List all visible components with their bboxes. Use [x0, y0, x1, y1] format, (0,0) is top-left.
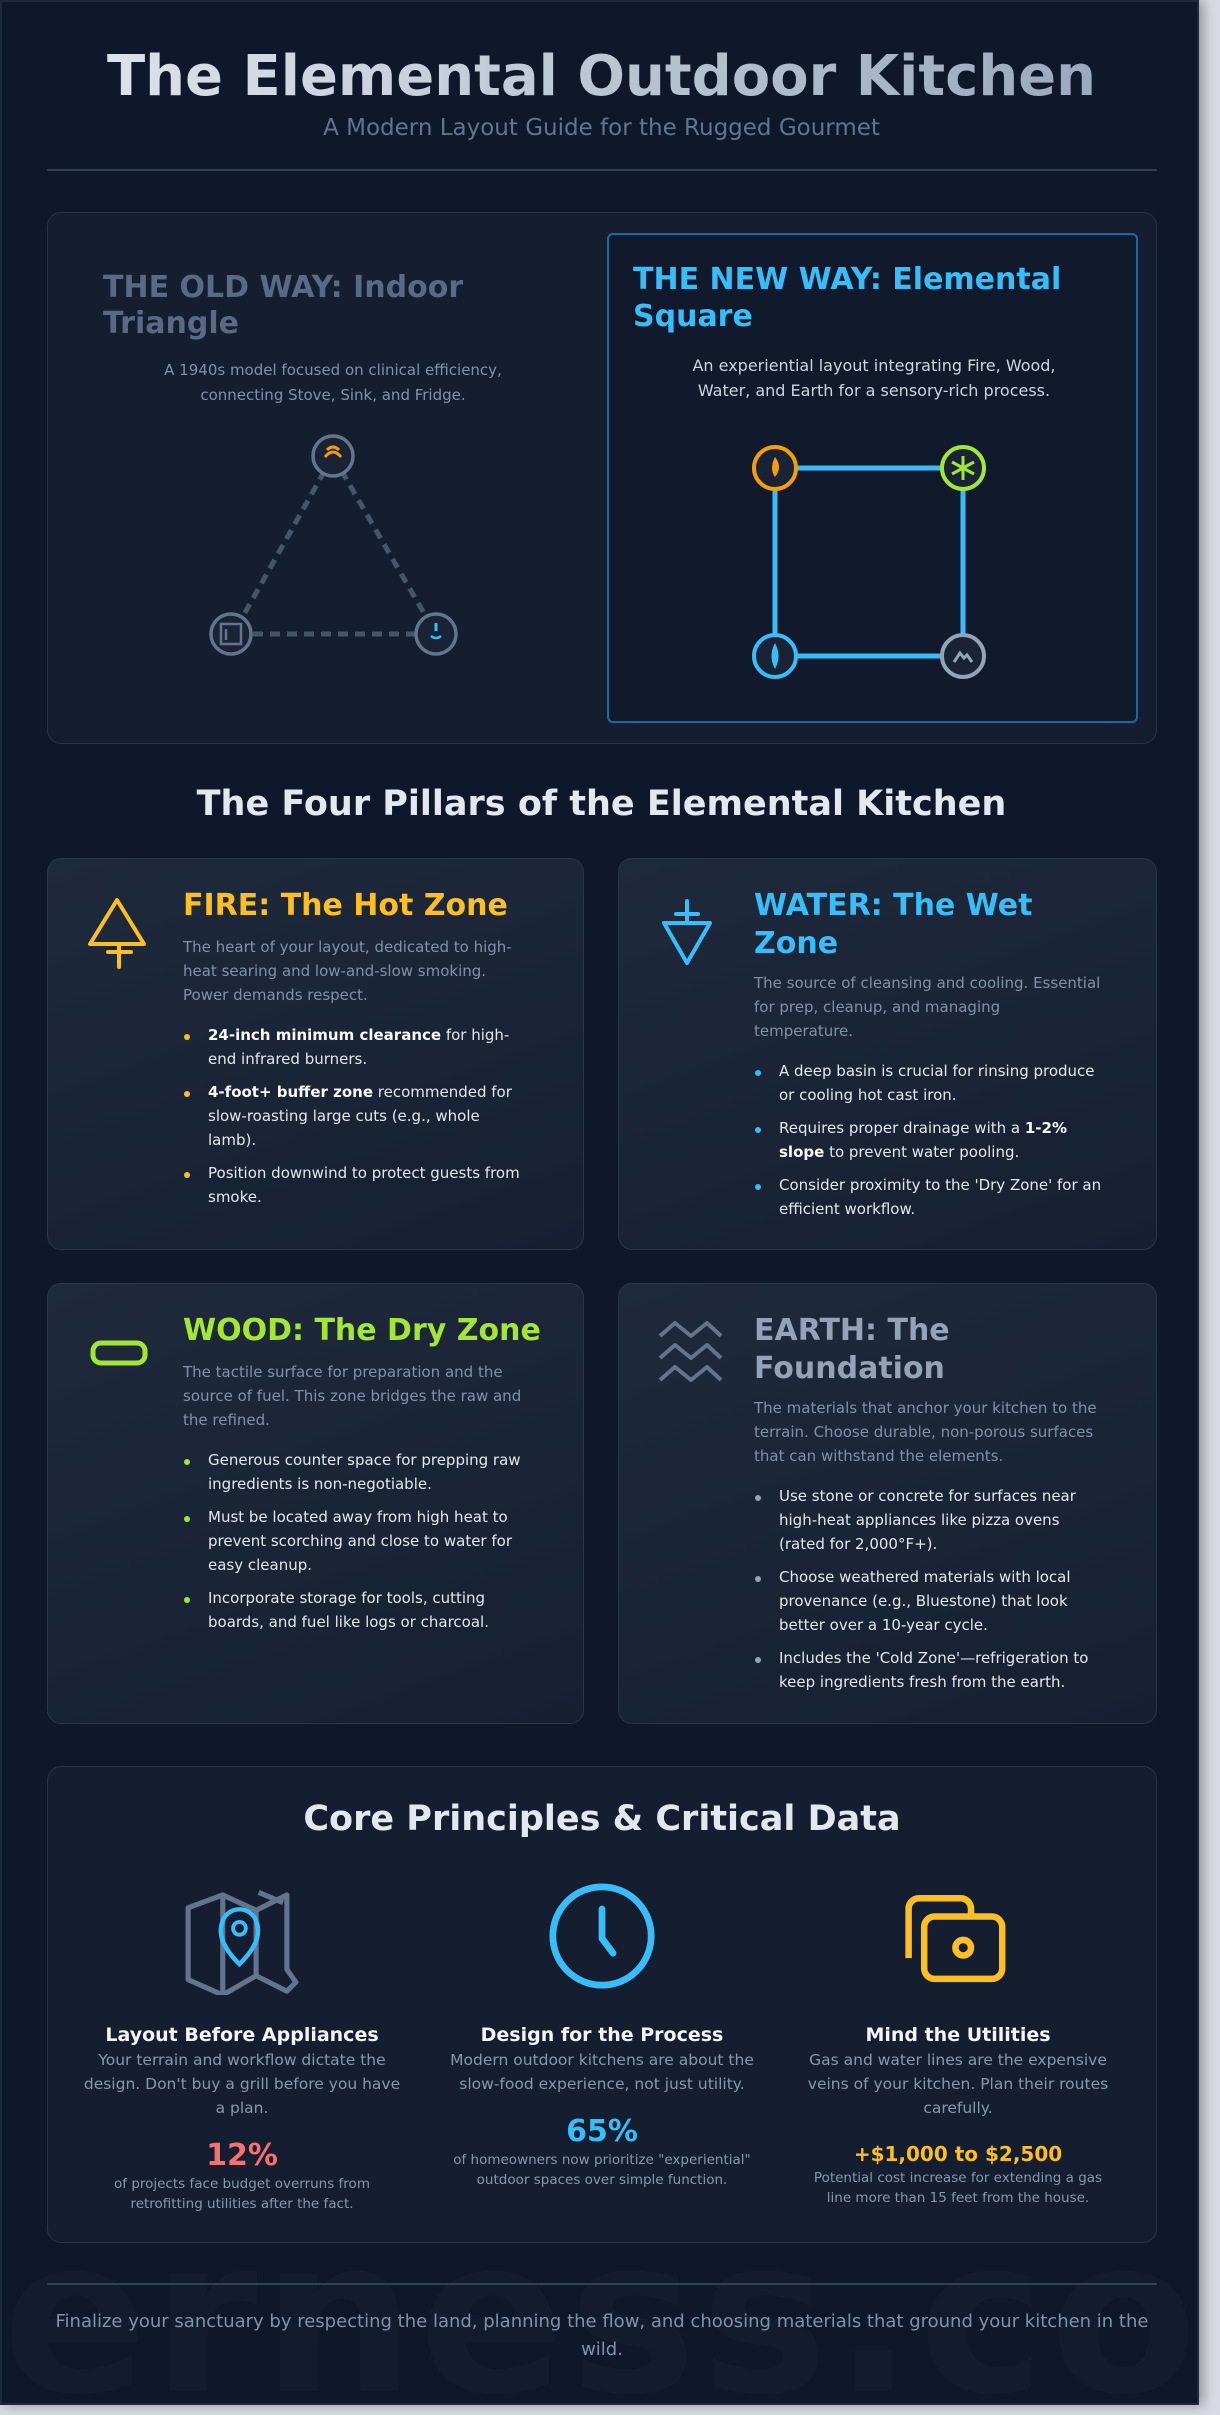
column: process — [450, 1884, 754, 2188]
water bullets: Consider proximity to the 'Dry Zone' for an efficient workflow. — [779, 1176, 1101, 1218]
earth bullets: Includes the 'Cold Zone'—refrigeration to keep ingredients fresh from the earth. — [779, 1649, 1088, 1691]
earth bullets: Use stone or concrete for surfaces near high-heat appliances like pizza ovens (rated for 2,000°F+). — [779, 1487, 1076, 1553]
card: water — [618, 858, 1157, 1250]
column: layout — [84, 1890, 400, 2212]
wood bullets: Must be located away from high heat to prevent scorching and close to water for easy cleanup. — [208, 1508, 512, 1574]
column: utilities: Potential cost increase for extending a gas line more than 15 feet from the house. — [814, 2170, 1102, 2206]
footer text: Finalize your sanctuary by respecting the land, planning the flow, and choosing materials that ground your kitchen in the wild. — [56, 2311, 1148, 2360]
column: layout: Your terrain and workflow dictate the design. Don't buy a grill before you have a plan. — [84, 2051, 400, 2117]
icon: water — [662, 899, 712, 966]
earth description: The materials that anchor your kitchen to the terrain. Choose durable, non-porous surfaces that can withstand the elements. — [754, 1399, 1097, 1465]
triangle diagram — [209, 434, 458, 656]
wood bullets: Generous counter space for prepping raw ingredients is non-negotiable. — [208, 1451, 521, 1493]
panel: core principles — [47, 1766, 1157, 2243]
wood bullets — [184, 1451, 521, 1631]
card: fire — [47, 858, 584, 1250]
fire title: FIRE: The Hot Zone — [183, 888, 508, 923]
icon: clock — [549, 1884, 655, 1988]
stat cost: +$1,000 to $2,500 — [854, 2142, 1062, 2166]
utilities title: Mind the Utilities — [865, 2024, 1051, 2046]
earth bullets: Choose weathered materials with local provenance (e.g., Bluestone) that look better over a 10-year cycle. — [779, 1568, 1071, 1634]
card: earth — [618, 1283, 1157, 1724]
column: layout: of projects face budget overruns from retrofitting utilities after the fact. — [114, 2176, 370, 2212]
fire description: The heart of your layout, dedicated to high-heat searing and low-and-slow smoking. Power demands respect. — [183, 938, 512, 1004]
heading: four pillars: The Four Pillars of the Elemental Kitchen — [197, 784, 1006, 824]
column: utilities: Gas and water lines are the expensive veins of your kitchen. Plan their routes carefully. — [808, 2051, 1108, 2117]
stat 65%: 65% — [566, 2114, 638, 2149]
icon: wood — [90, 1340, 148, 1366]
panel: comparison — [47, 212, 1157, 744]
column: process: of homeowners now prioritize "experiential" outdoor spaces over simple function. — [453, 2152, 751, 2188]
title: The Elemental Outdoor Kitchen — [107, 44, 1096, 109]
fire bullets: 4-foot+ buffer zone recommended for slow-roasting large cuts (e.g., whole lamb). — [208, 1083, 512, 1149]
subtitle: A Modern Layout Guide for the Rugged Gourmet — [323, 115, 880, 141]
water description: The source of cleansing and cooling. Essential for prep, cleanup, and managing temperature. — [754, 974, 1100, 1040]
icon: earth — [658, 1320, 722, 1382]
new way description: An experiential layout integrating Fire, Wood, Water, and Earth for a sensory-rich process. — [692, 356, 1056, 400]
fire bullets: 24-inch minimum clearance for high-end infrared burners. — [208, 1026, 509, 1068]
layout title: Layout Before Appliances — [105, 2024, 379, 2046]
process title: Design for the Process — [481, 2024, 723, 2046]
stat 12%: 12% — [206, 2138, 278, 2173]
water bullets: Requires proper drainage with a 1-2% slope to prevent water pooling. — [779, 1119, 1067, 1161]
wood description: The tactile surface for preparation and the source of fuel. This zone bridges the raw and the refined. — [183, 1363, 521, 1429]
square diagram — [752, 445, 986, 679]
fire bullets: Position downwind to protect guests from smoke. — [208, 1164, 520, 1206]
card: wood — [47, 1283, 584, 1724]
old way description: A 1940s model focused on clinical efficiency, connecting Stove, Sink, and Fridge. — [164, 361, 502, 404]
icon: map — [186, 1890, 298, 1995]
fire bullets — [184, 1026, 520, 1206]
core heading: Core Principles & Critical Data — [303, 1799, 901, 1839]
column: process: Modern outdoor kitchens are about the slow-food experience, not just utility. — [450, 2051, 754, 2093]
water title: WATER: The Wet Zone — [754, 888, 1032, 961]
water bullets — [755, 1062, 1101, 1218]
old way title: THE OLD WAY: Indoor Triangle — [103, 270, 463, 341]
wood bullets: Incorporate storage for tools, cutting boards, and fuel like logs or charcoal. — [208, 1589, 489, 1631]
new way box — [607, 233, 1138, 723]
wood title: WOOD: The Dry Zone — [183, 1313, 541, 1348]
icon: fire — [88, 898, 146, 969]
water bullets: A deep basin is crucial for rinsing produce or cooling hot cast iron. — [779, 1062, 1095, 1104]
earth bullets — [755, 1487, 1088, 1691]
earth title: EARTH: The Foundation — [754, 1313, 950, 1386]
column: utilities — [808, 1895, 1108, 2206]
new way title: THE NEW WAY: Elemental Square — [633, 262, 1061, 334]
icon: money — [905, 1895, 1006, 1982]
